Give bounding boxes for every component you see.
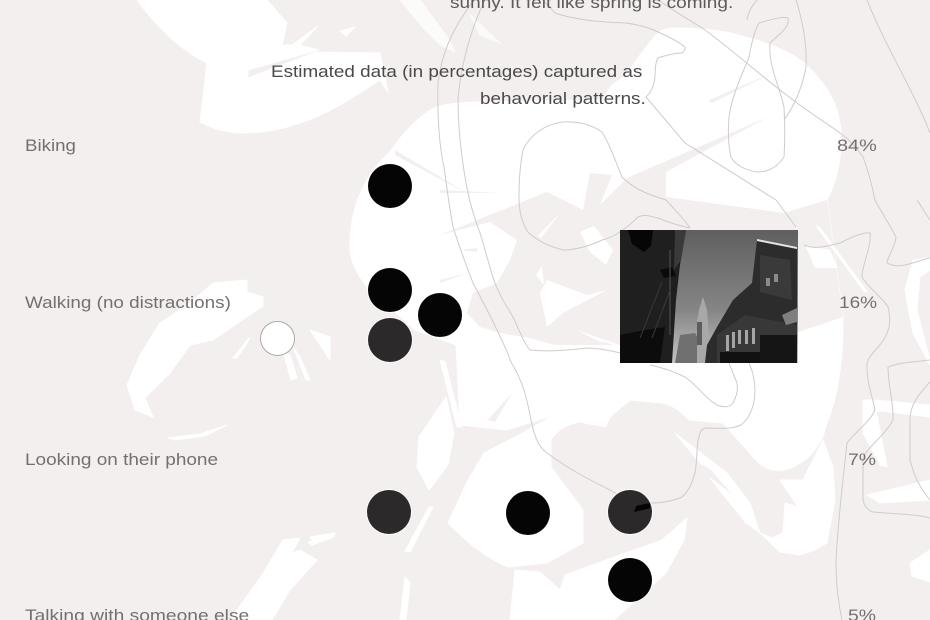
value: biking: 84% (837, 136, 877, 155)
dot: phone 2 (506, 491, 550, 535)
grey areas inside white (395, 73, 843, 422)
dot: talking (608, 558, 652, 602)
dot detail: black mark on phone dot 3 (634, 503, 650, 512)
label: biking: Biking (25, 136, 76, 155)
dot: phone 1 (367, 490, 411, 534)
dot: walking 1 (368, 268, 412, 312)
white detail inside grey (536, 213, 868, 343)
value: phone: 7% (848, 450, 876, 469)
subtitle: Estimated data (in percentages) captured as (271, 62, 642, 81)
dot: walking 2 (368, 318, 412, 362)
dot: biking (368, 164, 412, 208)
photo: street with church tower (620, 230, 798, 363)
dot: open marker (260, 321, 295, 356)
subtitle second line: behavorial patterns. (480, 89, 646, 108)
label: phone: Looking on their phone (25, 450, 218, 469)
value: walking: 16% (839, 293, 877, 312)
label: walking: Walking (no distractions) (25, 293, 231, 312)
dot: walking 3 (418, 293, 462, 337)
dot: phone 3 (608, 490, 652, 534)
contour lines (438, 0, 930, 620)
